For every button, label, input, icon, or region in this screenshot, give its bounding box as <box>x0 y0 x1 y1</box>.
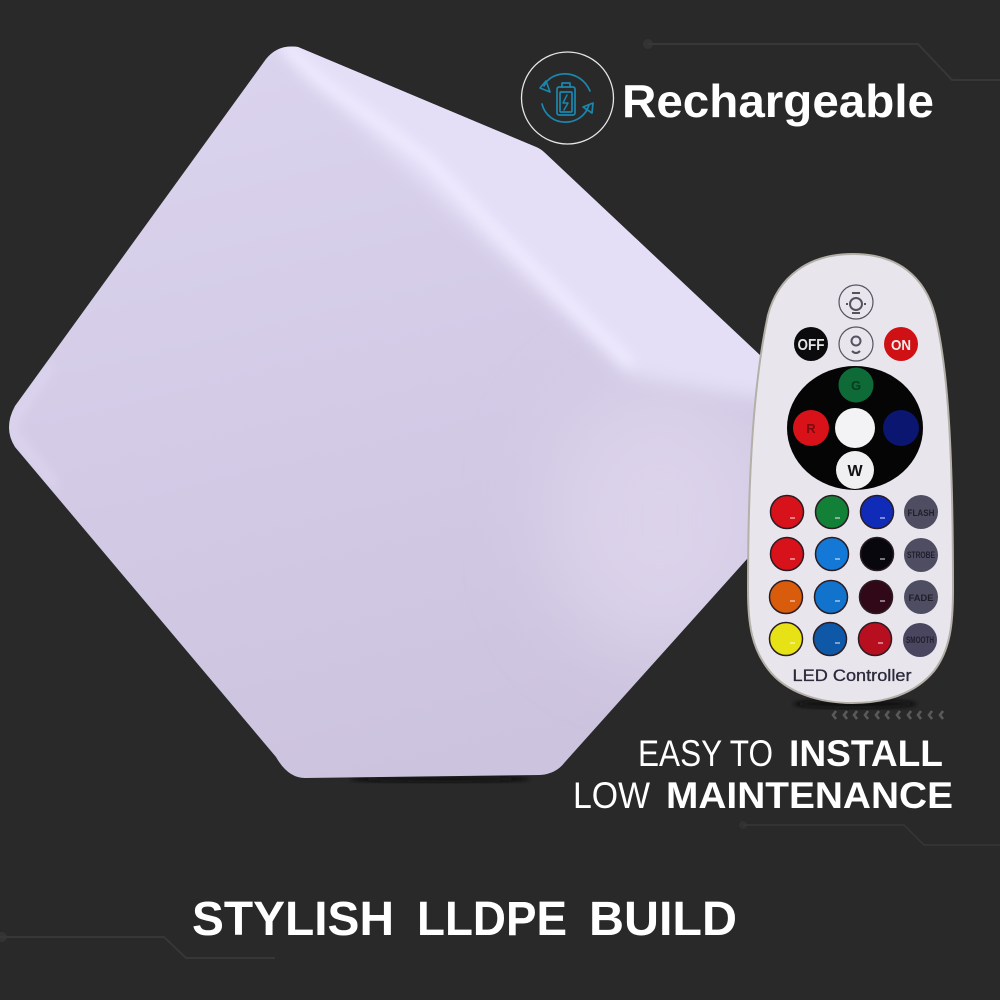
text: easy to install: INSTALL <box>789 733 943 774</box>
mode buttons <box>903 495 938 657</box>
circuit line: bottom left <box>0 932 275 958</box>
blue button <box>883 410 919 446</box>
text: low maintenance: MAINTENANCE <box>666 775 953 816</box>
cube left corner glow <box>8 365 55 485</box>
remote shadow <box>793 700 917 708</box>
off button: OFF <box>798 337 825 354</box>
text: low maintenance: LOW <box>573 775 650 816</box>
remote body <box>748 254 953 703</box>
centre white button <box>835 408 875 448</box>
green button: G <box>851 378 861 393</box>
heading: stylish lldpe build: BUILD <box>589 893 737 946</box>
mode buttons: FLASH <box>908 508 934 518</box>
icon: recharge badge <box>522 52 614 144</box>
cube shadow <box>350 776 530 782</box>
off button <box>794 327 828 361</box>
heading: stylish lldpe build: LLDPE <box>417 893 567 946</box>
circuit line: top right <box>643 39 1000 80</box>
heading: stylish lldpe build: STYLISH <box>192 893 394 946</box>
text: easy to install: EASY TO <box>638 733 773 774</box>
circuit line: lower right <box>739 821 1000 845</box>
cube ridge highlight <box>285 46 629 362</box>
colour button grid <box>770 496 894 656</box>
heading: stylish lldpe build <box>192 893 737 946</box>
cube right face tone <box>574 434 748 676</box>
remote control <box>748 254 953 703</box>
mode buttons: STROBE <box>907 550 935 560</box>
mode buttons: FADE <box>908 593 934 603</box>
button highlights <box>790 517 885 644</box>
text: easy to install <box>638 733 943 774</box>
on button: ON <box>891 337 911 354</box>
red button: R <box>806 421 816 436</box>
white button: W <box>847 463 863 480</box>
brightness down button <box>839 327 873 361</box>
colour wheel <box>787 366 923 490</box>
chevron row <box>833 711 943 719</box>
cube lamp <box>9 46 760 778</box>
cube main face <box>0 40 770 785</box>
on button <box>884 327 918 361</box>
heading: rechargeable: Rechargeable <box>622 75 934 127</box>
cube top face <box>279 46 760 399</box>
brightness up button <box>839 285 873 319</box>
mode buttons: SMOOTH <box>906 635 934 645</box>
remote label: LED Controller <box>792 667 912 685</box>
